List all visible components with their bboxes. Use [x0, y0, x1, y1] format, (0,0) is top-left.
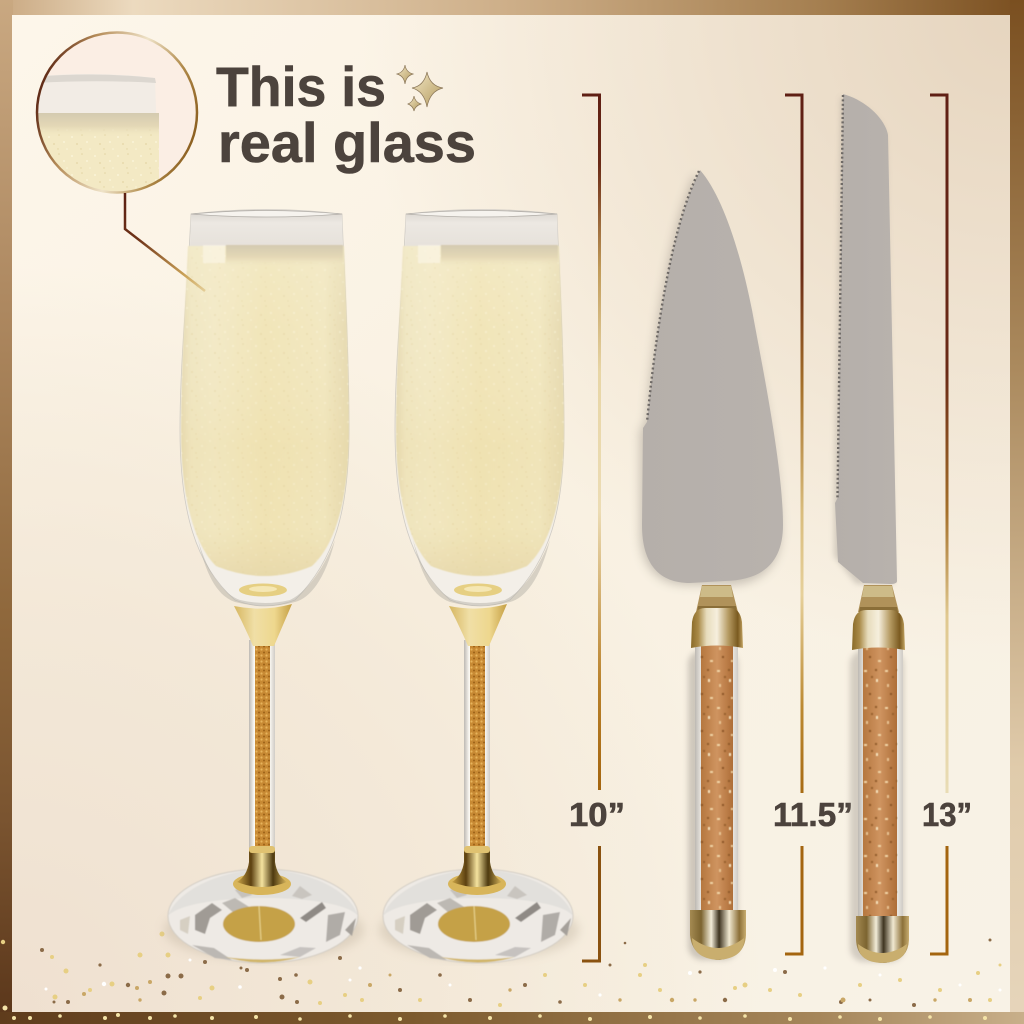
serrated edge — [647, 171, 699, 422]
magnifier ring — [37, 32, 197, 192]
handle tube — [858, 640, 903, 920]
handle shadow — [688, 650, 738, 960]
icon: sparkles — [397, 65, 443, 111]
server blade shadow — [640, 174, 781, 585]
title: This is — [216, 55, 386, 118]
label: 11.5 inch: 11.5” — [773, 796, 853, 833]
serrated edge — [838, 95, 843, 498]
dimension bracket: 11.5 inch — [773, 95, 853, 954]
knife blade — [835, 94, 897, 584]
dimension bracket: 10 inch — [569, 95, 625, 961]
dimension bracket: 13 inch — [922, 95, 972, 954]
collar — [691, 608, 743, 648]
glitter confetti — [1, 932, 1002, 1021]
neck — [696, 585, 738, 612]
cake knife — [834, 94, 909, 963]
collar — [852, 610, 905, 650]
label: 10 inch: 10” — [569, 796, 625, 833]
title: real glass — [218, 111, 476, 174]
knife blade shadow — [834, 97, 894, 584]
neck — [858, 585, 899, 612]
champagne flute, right — [379, 210, 579, 963]
handle tube — [695, 640, 738, 915]
champagne flute, left — [164, 210, 364, 963]
label: 13 inch: 13” — [922, 796, 972, 833]
cake server — [640, 170, 783, 960]
title — [216, 55, 476, 174]
magnified glass rim detail — [38, 74, 159, 192]
handle shadow — [850, 650, 904, 962]
end cap — [690, 910, 746, 960]
magnifier callout — [20, 30, 205, 291]
leader line — [125, 193, 205, 291]
server blade — [642, 170, 783, 583]
end cap — [856, 916, 909, 963]
